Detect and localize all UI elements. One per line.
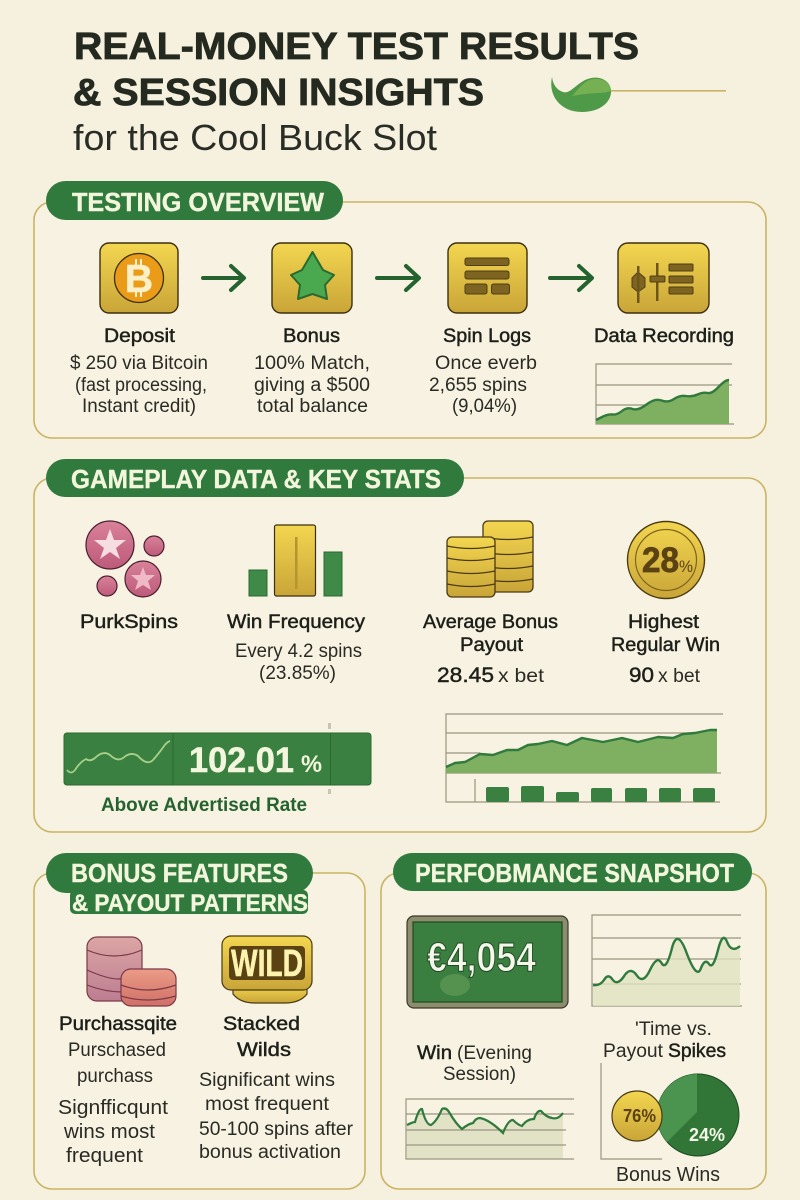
icon: 28% coin bbox=[628, 522, 704, 598]
icon: bitcoin bbox=[100, 243, 178, 313]
text block: win frequency bbox=[227, 612, 366, 684]
title bbox=[73, 26, 639, 158]
text block: stacked wilds: Significant wins bbox=[199, 1070, 335, 1091]
text block: deposit: Deposit bbox=[104, 326, 176, 347]
text block: highest regular win: Regular Win bbox=[611, 635, 720, 656]
label: data recording: Data Recording bbox=[594, 326, 734, 347]
icon: wild badge bbox=[222, 936, 312, 1003]
text block: purchase: frequent bbox=[66, 1145, 143, 1167]
heading: bonus features: BONUS FEATURES bbox=[71, 858, 288, 888]
callout: 102.01% rate: 102.01 bbox=[189, 741, 294, 780]
heading: bonus features bbox=[46, 853, 313, 917]
label: win evening session bbox=[417, 1043, 532, 1085]
icon: data recording bbox=[618, 243, 709, 313]
text block: stacked wilds: bonus activation bbox=[199, 1142, 341, 1163]
text block: purchase: purchass bbox=[77, 1066, 153, 1087]
label: win evening session: Win bbox=[417, 1043, 452, 1064]
title: REAL-MONEY TEST RESULTS bbox=[74, 26, 639, 68]
text block: average bonus payout: x bet bbox=[498, 666, 545, 687]
title: & SESSION INSIGHTS bbox=[73, 72, 484, 114]
text block: highest regular win: x bet bbox=[658, 666, 701, 687]
title: for the Cool Buck Slot bbox=[73, 117, 437, 158]
heading: bonus features: & PAYOUT PATTERNS bbox=[72, 890, 308, 917]
text block: stacked wilds bbox=[199, 1014, 354, 1163]
text block: spin logs bbox=[429, 326, 537, 417]
label: purkspins: PurkSpins bbox=[80, 612, 178, 633]
heading: performance snapshot: PERFOBMANCE SNAPSHOT bbox=[415, 858, 734, 888]
panel: bonus features bbox=[34, 853, 365, 1189]
icon: 28% coin: % bbox=[679, 557, 693, 576]
arrow bbox=[550, 266, 592, 290]
icon: pink spins bbox=[86, 521, 164, 597]
text block: bonus: total balance bbox=[257, 396, 368, 417]
chart: data recording area bbox=[596, 364, 734, 424]
icon: wild badge: WILD bbox=[231, 943, 303, 985]
label: time vs payout spikes bbox=[603, 1019, 726, 1062]
chart: bonus wins pie: 24% bbox=[689, 1125, 725, 1145]
text block: bonus bbox=[254, 326, 370, 417]
text block: highest regular win: 90 bbox=[629, 664, 654, 687]
chart: time vs payout spikes bbox=[592, 915, 742, 1006]
text block: win frequency: Win Frequency bbox=[227, 612, 366, 633]
text block: win frequency: Every 4.2 spins bbox=[235, 641, 362, 662]
text block: purchase: wins most bbox=[63, 1121, 155, 1143]
label: win evening session: (Evening bbox=[457, 1043, 532, 1064]
text block: stacked wilds: 50-100 spins after bbox=[199, 1119, 354, 1140]
callout: money note: €4,054 bbox=[427, 934, 536, 980]
icon: spin logs bbox=[448, 243, 527, 313]
heading: testing overview bbox=[46, 181, 343, 220]
callout: money note bbox=[407, 916, 568, 1008]
text block: deposit: $ 250 via Bitcoin bbox=[70, 353, 208, 374]
arrow bbox=[377, 266, 419, 290]
text block: deposit bbox=[70, 326, 208, 417]
text block: purchase: Purchassqite bbox=[59, 1014, 177, 1035]
text block: average bonus payout: Payout bbox=[460, 635, 524, 656]
callout: 102.01% rate bbox=[64, 723, 371, 794]
heading: testing overview: TESTING OVERVIEW bbox=[72, 187, 324, 217]
text block: bonus: Bonus bbox=[283, 326, 340, 347]
arrow bbox=[203, 266, 244, 290]
text block: spin logs: Once everb bbox=[435, 353, 537, 374]
text block: deposit: Instant credit) bbox=[82, 396, 196, 417]
label: win evening session: Session) bbox=[443, 1064, 516, 1085]
text block: average bonus payout: Average Bonus bbox=[423, 612, 558, 633]
icon: leaf with line bbox=[551, 77, 726, 112]
icon: coin stacks bbox=[447, 521, 533, 597]
icon: star bbox=[272, 243, 352, 313]
callout: 102.01% rate: % bbox=[301, 751, 322, 778]
chart: area and bars bbox=[446, 714, 723, 802]
text block: spin logs: Spin Logs bbox=[443, 326, 531, 347]
text block: purchase bbox=[58, 1014, 177, 1167]
panel: performance snapshot bbox=[381, 853, 766, 1189]
text block: highest regular win bbox=[611, 612, 720, 687]
text block: deposit: (fast processing, bbox=[75, 375, 207, 396]
text block: spin logs: (9,04%) bbox=[452, 396, 517, 417]
text block: win frequency: (23.85%) bbox=[259, 663, 336, 684]
text block: purchase: Signfficqunt bbox=[58, 1097, 168, 1119]
chart: bonus wins pie: 76% bbox=[623, 1106, 656, 1126]
heading: gameplay data: GAMEPLAY DATA & KEY STATS bbox=[71, 464, 441, 494]
label: time vs payout spikes: Spikes bbox=[668, 1041, 726, 1062]
text block: stacked wilds: most frequent bbox=[205, 1094, 330, 1115]
icon: purchase chips bbox=[87, 937, 176, 1006]
text block: average bonus payout bbox=[423, 612, 558, 687]
text block: stacked wilds: Wilds bbox=[237, 1040, 291, 1061]
icon: 28% coin: 28 bbox=[642, 541, 679, 580]
text block: average bonus payout: 28.45 bbox=[437, 664, 494, 687]
text block: spin logs: 2,655 spins bbox=[429, 375, 527, 396]
panel: testing overview bbox=[34, 181, 766, 438]
panel: gameplay data and key stats bbox=[34, 459, 766, 832]
label: time vs payout spikes: Payout bbox=[603, 1041, 664, 1062]
label: above advertised rate: Above Advertised Rate bbox=[101, 795, 307, 816]
chart: bonus wins pie bbox=[601, 1063, 739, 1159]
label: bonus wins: Bonus Wins bbox=[616, 1164, 720, 1186]
icon: bitcoin: B bbox=[125, 258, 153, 301]
text block: highest regular win: Highest bbox=[628, 612, 700, 633]
text block: bonus: giving a $500 bbox=[254, 375, 370, 396]
icon: win frequency bars bbox=[249, 525, 342, 596]
text block: purchase: Purschased bbox=[68, 1040, 166, 1061]
label: time vs payout spikes: 'Time vs. bbox=[635, 1019, 712, 1040]
chart: evening session line bbox=[406, 1099, 574, 1159]
text block: stacked wilds: Stacked bbox=[223, 1014, 300, 1035]
text block: bonus: 100% Match, bbox=[254, 353, 370, 374]
